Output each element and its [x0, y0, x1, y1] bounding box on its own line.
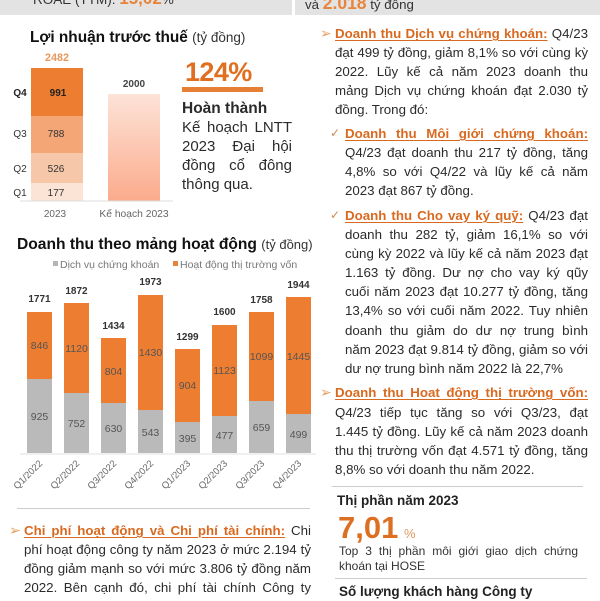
chart: quarterly revenue stacked bars: 1099 [250, 351, 273, 363]
text block: brokerage revenue: Doanh thu Môi giới chứng khoán: [345, 126, 588, 141]
chart: quarterly revenue stacked bars: 1430 [139, 347, 162, 359]
check icon: ✓ [330, 126, 340, 140]
chart: quarterly revenue stacked bars: Q2/2022 [49, 458, 82, 492]
chart: quarterly revenue stacked bars: 630 [105, 423, 122, 435]
heading: revenue by segment: Doanh thu theo mảng hoạt động (tỷ đồng) [17, 236, 313, 253]
text block: capital market revenue [320, 384, 588, 477]
chart: quarterly revenue stacked bars: 925 [31, 411, 48, 423]
chart: quarterly revenue stacked bars: 752 [68, 418, 85, 430]
chart: quarterly revenue stacked bars: 477 [216, 430, 233, 442]
text block: margin lending revenue: cuối năm 2023 đạt 10.277 tỷ đồng, tăng [345, 284, 588, 299]
text: completion note: Hoàn thành [182, 100, 267, 117]
chart: quarterly revenue stacked bars: Q3/2023 [234, 458, 267, 492]
chart: quarterly revenue stacked bars: 1758 [250, 295, 273, 306]
heading: customer count: Số lượng khách hàng Công ty [339, 584, 532, 599]
chart: quarterly revenue stacked bars [12, 259, 316, 492]
text block: margin lending revenue: cùng kỳ 2022 và lũy kế cả năm 2023 đạt [345, 246, 588, 261]
chart: quarterly revenue stacked bars: 1973 [139, 277, 162, 288]
text block: capital market revenue: 1.445 tỷ đồng. Lũy kế cả năm 2023 doanh [335, 424, 588, 439]
chart: quarterly revenue stacked bars: 1123 [213, 365, 236, 377]
text block: operating and financial expenses [9, 522, 311, 595]
chart: profit before tax vs plan: 2023 [44, 209, 67, 220]
text block: capital market revenue: thu thị trường vốn đạt 4.571 tỷ đồng, tăng [335, 443, 588, 458]
chart: quarterly revenue stacked bars: Q4/2023 [271, 458, 304, 492]
chart: profit before tax vs plan: Q1 [13, 188, 27, 199]
text block: capital market revenue: Doanh thu Hoat động thị trường vốn: [335, 385, 588, 400]
top strip: left summary [0, 0, 292, 15]
rule [182, 87, 263, 92]
chart: quarterly revenue stacked bars: 804 [105, 366, 122, 378]
chart: profit before tax vs plan: Kế hoạch 2023 [99, 208, 169, 220]
legend: Hoạt động thị trường vốn [180, 259, 297, 271]
text block: securities services revenue: đạt 499 tỷ đồng, giảm 8,1% so với cùng kỳ [335, 45, 588, 60]
panel: market share [337, 493, 578, 573]
text block: operating and financial expenses: đồng giảm mạnh so với mức 3.806 tỷ đồng năm [24, 561, 311, 576]
chart: quarterly revenue stacked bars: 846 [31, 340, 48, 352]
text block: securities services revenue: đồng. Trong đó: [335, 102, 428, 117]
callout: 124% plan completion [182, 57, 292, 193]
chart: profit before tax vs plan: Q4 [13, 88, 27, 99]
text block: operating and financial expenses: 2022. Bên cạnh đó, chi phí tài chính Công ty [24, 580, 311, 595]
chart: quarterly revenue stacked bars: 395 [179, 433, 196, 445]
text block: margin lending revenue: 1.163 tỷ đồng. Dư nợ cho vay ký qũy [345, 265, 588, 280]
legend: Dịch vụ chứng khoán [60, 259, 159, 271]
chart: profit before tax vs plan [13, 52, 173, 220]
bullet arrow: ➢ [9, 522, 21, 538]
text block: margin lending revenue: Doanh thu Cho vay ký quỹ: Q4/23 đạt [345, 208, 588, 223]
chart: quarterly revenue stacked bars: 1944 [287, 280, 310, 291]
text: market share note [339, 544, 578, 573]
value: 124%: 124% [185, 57, 252, 87]
chart: quarterly revenue stacked bars: 1600 [213, 307, 236, 318]
chart: quarterly revenue stacked bars: 1872 [65, 286, 88, 297]
chart: quarterly revenue stacked bars: 1299 [176, 332, 199, 343]
heading: profit before tax: Lợi nhuận trước thuế (tỷ đồng) [30, 29, 245, 46]
text: completion note: đồng cổ đông [182, 157, 292, 174]
chart: quarterly revenue stacked bars: 659 [253, 422, 270, 434]
chart: quarterly revenue stacked bars: 543 [142, 427, 159, 439]
value: 7,01%: 7,01 % [338, 510, 416, 545]
text block: brokerage revenue: Q4/23 đạt doanh thu 217 tỷ đồng, tăng [345, 145, 588, 160]
chart: profit before tax vs plan: 177 [48, 188, 65, 199]
text: completion note: thông qua. [182, 176, 253, 193]
text: market share note: khoán tại HOSE [339, 559, 425, 573]
text block: margin lending revenue: doanh thu 282 tỷ, giảm 16,1% so với [345, 227, 588, 242]
chart: profit before tax vs plan: 788 [48, 129, 65, 140]
text block: brokerage revenue: 2023 đạt 867 tỷ đồng. [345, 183, 474, 198]
text block: margin lending revenue: 13,4% so với cuối năm 2022. Tuy nhiên [345, 303, 588, 318]
check icon: ✓ [330, 208, 340, 222]
chart: quarterly revenue stacked bars: Q4/2022 [123, 458, 156, 492]
text block: securities services revenue: mảng Dịch vụ chứng khoán đạt 2.030 tỷ [335, 83, 588, 98]
text: completion note: 2023 Đại hội [182, 138, 292, 155]
text block: securities services revenue: Doanh thu Dịch vụ chứng khoán: Q4/23 [335, 26, 588, 41]
text block: securities services revenue: 2022. Lũy kế cả năm 2023 doanh thu [335, 64, 588, 79]
text block: securities services revenue [320, 25, 588, 117]
chart: quarterly revenue stacked bars: 904 [179, 380, 196, 392]
chart: profit before tax vs plan: 2482 [45, 52, 69, 64]
heading: market share: Thị phần năm 2023 [337, 493, 459, 508]
chart: profit before tax vs plan: Q2 [13, 164, 27, 175]
text block: margin lending revenue: doanh thu giảm do dư nợ trung bình [345, 323, 588, 338]
text block: operating and financial expenses: Chi phí hoạt động và Chi phí tài chính: Chi [24, 523, 311, 538]
divider [17, 508, 310, 509]
chart: quarterly revenue stacked bars: 1434 [102, 321, 125, 332]
top strip: right summary [295, 0, 600, 15]
text block: margin lending revenue [330, 208, 588, 376]
chart: quarterly revenue stacked bars: 1771 [28, 294, 51, 305]
text: completion note: Kế hoạch LNTT [182, 119, 292, 136]
chart: profit before tax vs plan: Q3 [13, 129, 27, 140]
chart: profit before tax vs plan: 526 [48, 164, 65, 175]
text: market share note: Top 3 thị phần môi giới giao dịch chứng [339, 544, 578, 558]
chart: quarterly revenue stacked bars: Q1/2022 [12, 458, 45, 492]
divider [335, 578, 587, 579]
text block: margin lending revenue: năm 2023 đạt 9.814 tỷ đồng, giảm so với [345, 342, 588, 357]
bullet arrow: ➢ [320, 25, 332, 41]
chart: quarterly revenue stacked bars: Q1/2023 [160, 458, 193, 492]
text block: operating and financial expenses: phí hoạt động công ty năm 2023 ở mức 2.194 tỷ [24, 542, 311, 557]
text block: brokerage revenue [330, 126, 588, 198]
chart: quarterly revenue stacked bars: Q2/2023 [197, 458, 230, 492]
text block: brokerage revenue: 4,8% so với Q4/22 và lũy kế cả năm [345, 164, 588, 179]
text: completion note [182, 100, 292, 193]
divider [332, 486, 583, 487]
text block: capital market revenue: 8,8% so với doanh thu năm 2022. [335, 462, 534, 477]
chart: quarterly revenue stacked bars: 499 [290, 429, 307, 441]
legend [53, 259, 297, 271]
text block: margin lending revenue: dư nợ trung bình năm 2022 là 22,7% [345, 361, 563, 376]
chart: quarterly revenue stacked bars: 1445 [287, 351, 310, 363]
chart: profit before tax vs plan: 2000 [123, 79, 146, 90]
bullet arrow: ➢ [320, 384, 332, 400]
chart: profit before tax vs plan: 991 [50, 88, 67, 99]
text block: capital market revenue: Q4/23 tiếp tục tăng so với Q3/23, đạt [335, 405, 588, 420]
chart: quarterly revenue stacked bars: Q3/2022 [86, 458, 119, 492]
chart: quarterly revenue stacked bars: 1120 [65, 343, 88, 355]
